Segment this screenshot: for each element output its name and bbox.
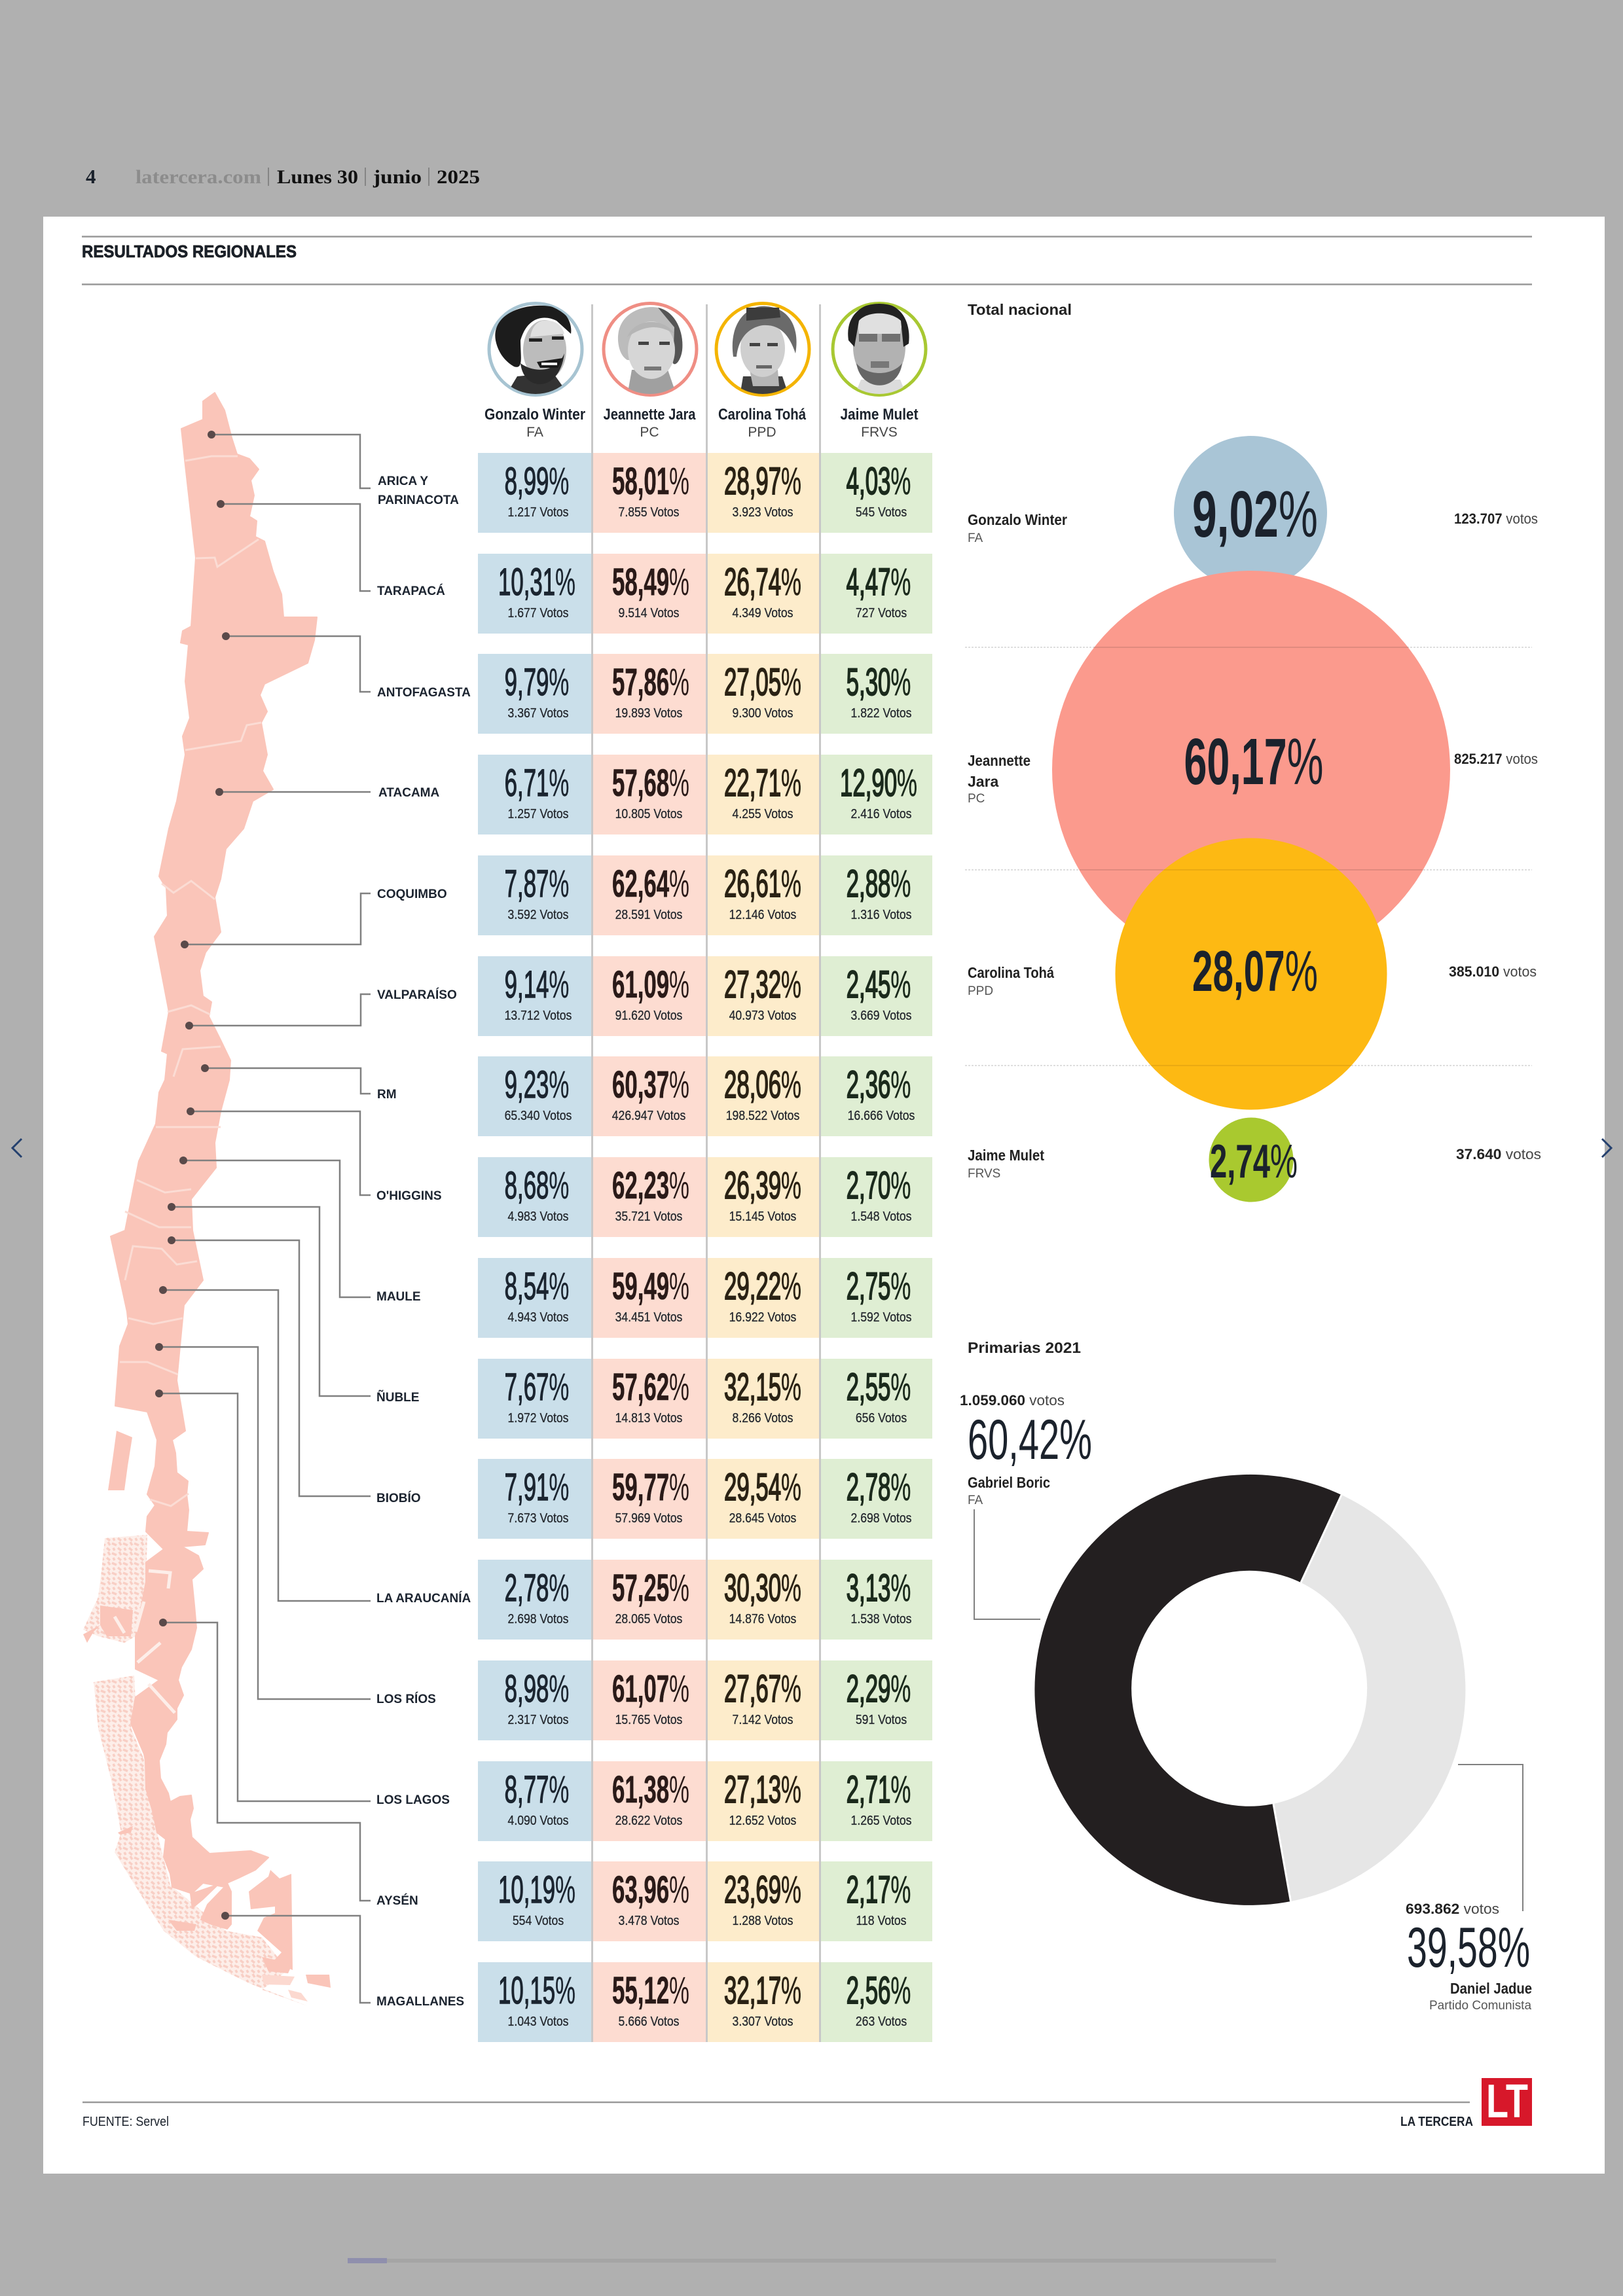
row: La Araucanía: 1.538 Votos: [851, 1611, 911, 1626]
candidate name: Tohá: Carolina Tohá: [718, 406, 807, 423]
row: Tarapacá: 4.349 Votos: [733, 605, 793, 620]
row: Antofagasta: [478, 654, 932, 734]
row: Biobío: [478, 1459, 932, 1539]
row: O'Higgins: 62,23%: [612, 1165, 689, 1207]
connector: Aysén: [159, 1619, 371, 1901]
row: Antofagasta: 9,79%: [505, 662, 569, 704]
connector: Los Lagos: [155, 1390, 371, 1801]
row: O'Higgins: 15.145 Votos: [729, 1209, 796, 1223]
row: Magallanes: 55,12%: [612, 1970, 689, 2012]
row: O'Higgins: 1.548 Votos: [851, 1209, 911, 1223]
connector: Tarapacá: [217, 500, 371, 591]
votes: Winter: 123.707 votos: [1454, 511, 1538, 527]
callout: Daniel Jadue: Partido Comunista: [1429, 1999, 1531, 2013]
region labels: ARICA Y: [378, 475, 428, 488]
row: RM: 28,06%: [724, 1064, 801, 1106]
row: Maule: 34.451 Votos: [615, 1310, 682, 1324]
row: Ñuble: [478, 1359, 932, 1439]
row: Coquimbo: 12.146 Votos: [729, 907, 796, 922]
candidate name: Jara: PC: [640, 425, 659, 440]
portrait: Gonzalo Winter: [489, 304, 582, 396]
row: Magallanes: 5.666 Votos: [619, 2014, 679, 2028]
page header: folio and date: junio: [373, 166, 422, 188]
label: Winter: [968, 511, 1067, 545]
row: Ñuble: 7,67%: [505, 1367, 569, 1408]
row: RM: 9,23%: [505, 1064, 569, 1106]
row: Coquimbo: 26,61%: [724, 863, 801, 905]
connector: RM: [201, 1064, 371, 1094]
bubble: Jara: 60,17%: [1184, 725, 1324, 798]
bubble: Winter: [1174, 436, 1327, 589]
footer: [82, 2075, 1532, 2129]
row: Los Ríos: 61,07%: [612, 1668, 689, 1710]
row: La Araucanía: 2.698 Votos: [508, 1611, 568, 1626]
panel: total nacional: [965, 301, 1541, 1202]
region labels: COQUIMBO: [377, 888, 447, 901]
row: Arica y Parinacota: 1.217 Votos: [508, 505, 568, 519]
row: Maule: 4.943 Votos: [508, 1310, 568, 1324]
row: Coquimbo: 28.591 Votos: [615, 907, 682, 922]
row: Los Ríos: 2,29%: [847, 1668, 911, 1710]
row: RM: 426.947 Votos: [612, 1108, 685, 1122]
connector: Arica y Parinacota: [208, 431, 371, 488]
label: Jara: Jeannette: [968, 752, 1030, 769]
callout: Gabriel Boric: FA: [968, 1494, 983, 1507]
row: Antofagasta: 5,30%: [847, 662, 911, 704]
candidate name: Mulet: Jaime Mulet: [841, 406, 918, 423]
row: Coquimbo: 62,64%: [612, 863, 689, 905]
page header: folio and date: latercera.com: [136, 166, 261, 188]
row: Atacama: 12,90%: [840, 762, 917, 804]
region labels: AYSÉN: [376, 1893, 418, 1908]
connector: O'Higgins: [187, 1107, 371, 1195]
row: Aysén: 2,17%: [847, 1869, 911, 1911]
region labels: MAGALLANES: [376, 1995, 464, 2009]
row: Biobío: 57.969 Votos: [615, 1511, 682, 1525]
votes: Mulet: 37.640 votos: [1456, 1146, 1541, 1162]
page header: folio and date: 2025: [437, 166, 480, 188]
connector: Coquimbo: [181, 893, 371, 948]
row: Coquimbo: 1.316 Votos: [851, 907, 911, 922]
brand name: LA TERCERA: [1400, 2115, 1473, 2129]
row: O'Higgins: 35.721 Votos: [615, 1209, 682, 1223]
row: Biobío: 29,54%: [724, 1467, 801, 1509]
row: Los Lagos: 61,38%: [612, 1769, 689, 1811]
source note: FUENTE: Servel: [82, 2115, 169, 2129]
row: Antofagasta: 57,86%: [612, 662, 689, 704]
candidate name: Jara: [604, 406, 696, 440]
region labels: PARINACOTA: [378, 493, 459, 507]
row: Arica y Parinacota: 58,01%: [612, 461, 689, 503]
region labels: TARAPACÁ: [377, 584, 445, 598]
row: Los Ríos: [478, 1660, 932, 1740]
candidate name: Mulet: [841, 406, 918, 440]
votes: Jara: 825.217 votos: [1454, 751, 1538, 767]
callout: Gabriel Boric: Gabriel Boric: [968, 1474, 1050, 1491]
callout: Daniel Jadue: 693.862 votos: [1406, 1901, 1499, 1917]
bubble: Mulet: [1209, 1118, 1298, 1202]
label: Mulet: FRVS: [968, 1167, 1000, 1181]
bubble: Jara: [1052, 571, 1450, 969]
row: Biobío: 7,91%: [505, 1467, 569, 1509]
row: Coquimbo: 2,88%: [847, 863, 911, 905]
row: Biobío: 2.698 Votos: [851, 1511, 911, 1525]
row: Maule: [478, 1258, 932, 1338]
candidate name: Tohá: PPD: [748, 425, 776, 440]
arrow: previous page: [12, 1139, 22, 1157]
row: Atacama: 1.257 Votos: [508, 806, 568, 821]
region labels: RM: [377, 1088, 397, 1102]
row: Los Ríos: 27,67%: [724, 1668, 801, 1710]
row: O'Higgins: 2,70%: [847, 1165, 911, 1207]
callout: Gabriel Boric: [960, 1392, 1092, 1619]
row: Magallanes: 3.307 Votos: [733, 2014, 793, 2028]
portrait: Jaime Mulet: [833, 303, 926, 396]
island: Chiloé: [108, 1431, 132, 1490]
heading: Total nacional: Total nacional: [968, 301, 1072, 318]
row: Tarapacá: 26,74%: [724, 562, 801, 603]
row: Valparaíso: 27,32%: [724, 964, 801, 1006]
bubble: Tohá: [1116, 838, 1387, 1110]
row: Valparaíso: 91.620 Votos: [615, 1008, 682, 1022]
row: O'Higgins: [478, 1157, 932, 1237]
row: Magallanes: [478, 1962, 932, 2042]
row: Los Lagos: 1.265 Votos: [851, 1813, 911, 1827]
row: Atacama: 57,68%: [612, 762, 689, 804]
row: Ñuble: 57,62%: [612, 1367, 689, 1408]
row: Los Lagos: 27,13%: [724, 1769, 801, 1811]
row: Ñuble: 8.266 Votos: [733, 1410, 793, 1425]
candidate headers: [484, 303, 926, 440]
candidate name: Winter: Gonzalo Winter: [484, 406, 585, 423]
callout: Daniel Jadue: [1406, 1765, 1532, 2013]
connector: Los Ríos: [155, 1343, 371, 1699]
label: Winter: FA: [968, 531, 983, 545]
viewer scrollbar: [348, 2258, 1276, 2263]
row: Maule: 29,22%: [724, 1266, 801, 1308]
Tierra del Fuego and southern islands: [83, 1605, 331, 1988]
row: Aysén: 10,19%: [498, 1869, 575, 1911]
row: Tarapacá: 1.677 Votos: [508, 605, 568, 620]
row: La Araucanía: 2,78%: [505, 1568, 569, 1609]
row: O'Higgins: 4.983 Votos: [508, 1209, 568, 1223]
row: Ñuble: 656 Votos: [856, 1410, 907, 1425]
callout: Gabriel Boric: 60,42%: [968, 1408, 1092, 1471]
row: La Araucanía: 57,25%: [612, 1568, 689, 1609]
row: Atacama: 6,71%: [505, 762, 569, 804]
row: La Araucanía: 14.876 Votos: [729, 1611, 796, 1626]
label: Mulet: [968, 1147, 1044, 1181]
row: Aysén: 1.288 Votos: [733, 1913, 793, 1928]
region labels: ATACAMA: [378, 786, 439, 800]
row: Aysén: [478, 1861, 932, 1941]
row: RM: 16.666 Votos: [848, 1108, 915, 1122]
row: Los Lagos: 2,71%: [847, 1769, 911, 1811]
row: Maule: 59,49%: [612, 1266, 689, 1308]
row: Atacama: 2.416 Votos: [851, 806, 911, 821]
row: Tarapacá: 10,31%: [498, 562, 575, 603]
bubble: Mulet: 2,74%: [1210, 1136, 1298, 1188]
donut chart: [1034, 1475, 1465, 1905]
row: Los Ríos: 7.142 Votos: [733, 1712, 793, 1727]
row: Antofagasta: 9.300 Votos: [733, 706, 793, 720]
label: Tohá: Carolina Tohá: [968, 964, 1054, 981]
candidate name: Tohá: [718, 406, 807, 440]
row: Arica y Parinacota: 4,03%: [847, 461, 911, 503]
label: Jara: Jara: [968, 773, 999, 790]
row: Maule: 16.922 Votos: [729, 1310, 796, 1324]
row: Arica y Parinacota: 28,97%: [724, 461, 801, 503]
region labels: ANTOFAGASTA: [377, 686, 471, 700]
row: Coquimbo: [478, 855, 932, 935]
row: Ñuble: 1.972 Votos: [508, 1410, 568, 1425]
row: Magallanes: 32,17%: [724, 1970, 801, 2012]
row: Tarapacá: 9.514 Votos: [619, 605, 679, 620]
row: Antofagasta: 3.367 Votos: [508, 706, 568, 720]
label: Jara: [968, 752, 1030, 806]
candidate name: Winter: FA: [526, 425, 543, 440]
row: Arica y Parinacota: 7.855 Votos: [619, 505, 679, 519]
candidate name: Mulet: FRVS: [861, 425, 898, 440]
row: Tarapacá: 4,47%: [847, 562, 911, 603]
row: Ñuble: 2,55%: [847, 1367, 911, 1408]
row: Los Ríos: 8,98%: [505, 1668, 569, 1710]
heading: Primarias 2021: Primarias 2021: [968, 1339, 1081, 1356]
row: Valparaíso: [478, 956, 932, 1036]
row: Atacama: 22,71%: [724, 762, 801, 804]
results table: [478, 453, 932, 2042]
candidate name: Jara: Jeannette Jara: [604, 406, 696, 423]
row: Magallanes: 2,56%: [847, 1970, 911, 2012]
callout: Daniel Jadue: Daniel Jadue: [1450, 1980, 1532, 1997]
row: RM: 198.522 Votos: [726, 1108, 799, 1122]
row: Maule: 1.592 Votos: [851, 1310, 911, 1324]
panel: primarias 2021: [960, 1339, 1532, 2013]
connector: Biobío: [168, 1236, 371, 1496]
connector: Valparaíso: [185, 994, 371, 1030]
row: Atacama: 4.255 Votos: [733, 806, 793, 821]
region labels: MAULE: [376, 1290, 421, 1304]
connector: Magallanes: [221, 1912, 371, 2003]
row: Aysén: 23,69%: [724, 1869, 801, 1911]
row: Los Lagos: 28.622 Votos: [615, 1813, 682, 1827]
row: Aysén: 118 Votos: [856, 1913, 906, 1928]
callout: Gabriel Boric: 1.059.060 votos: [960, 1392, 1065, 1408]
region labels: LA ARAUCANÍA: [376, 1591, 471, 1605]
row: RM: [478, 1056, 932, 1136]
row: Arica y Parinacota: 8,99%: [505, 461, 569, 503]
callout: Daniel Jadue: 39,58%: [1407, 1916, 1530, 1979]
row: Valparaíso: 3.669 Votos: [851, 1008, 911, 1022]
page header: folio and date: 4: [86, 165, 96, 188]
row: Los Lagos: 12.652 Votos: [729, 1813, 796, 1827]
row: O'Higgins: 26,39%: [724, 1165, 801, 1207]
row: Los Lagos: [478, 1761, 932, 1841]
row: Los Lagos: 4.090 Votos: [508, 1813, 568, 1827]
label: Tohá: [968, 964, 1054, 998]
row: Arica y Parinacota: [478, 453, 932, 533]
connector: Atacama: [215, 788, 371, 796]
connector: Antofagasta: [222, 632, 371, 692]
region labels: O'HIGGINS: [376, 1189, 442, 1203]
row: Los Lagos: 8,77%: [505, 1769, 569, 1811]
row: Ñuble: 14.813 Votos: [615, 1410, 682, 1425]
row: Los Ríos: 15.765 Votos: [615, 1712, 682, 1727]
portrait: Carolina Tohá: [716, 304, 809, 396]
region labels: BIOBÍO: [376, 1491, 421, 1505]
connector: Maule: [179, 1157, 371, 1297]
row: Antofagasta: 27,05%: [724, 662, 801, 704]
row: Tarapacá: 58,49%: [612, 562, 689, 603]
row: Biobío: 28.645 Votos: [729, 1511, 796, 1525]
row: Tarapacá: [478, 554, 932, 634]
section title: RESULTADOS REGIONALES: [82, 242, 297, 261]
row: Aysén: 554 Votos: [513, 1913, 564, 1928]
row: Aysén: 63,96%: [612, 1869, 689, 1911]
bubble: Tohá: 28,07%: [1192, 939, 1318, 1003]
arrow: next page: [1602, 1139, 1611, 1157]
row: Maule: 8,54%: [505, 1266, 569, 1308]
row: Maule: 2,75%: [847, 1266, 911, 1308]
label: Mulet: Jaime Mulet: [968, 1147, 1044, 1164]
row: Arica y Parinacota: 545 Votos: [856, 505, 907, 519]
logo: LT: LT: [1486, 2075, 1528, 2128]
region labels: VALPARAÍSO: [377, 988, 457, 1002]
row: Ñuble: 32,15%: [724, 1367, 801, 1408]
connector: La Araucanía: [159, 1286, 371, 1601]
connector lines from regions to labels: [155, 431, 371, 2003]
row: RM: 65.340 Votos: [505, 1108, 572, 1122]
connector: Ñuble: [168, 1203, 371, 1396]
label: Winter: Gonzalo Winter: [968, 511, 1067, 528]
row: Valparaíso: 61,09%: [612, 964, 689, 1006]
row: Los Ríos: 591 Votos: [856, 1712, 907, 1727]
row: Tarapacá: 727 Votos: [856, 605, 907, 620]
row: Atacama: [478, 755, 932, 834]
portrait: Jeannette Jara: [604, 304, 697, 396]
row: Coquimbo: 7,87%: [505, 863, 569, 905]
row: Biobío: 59,77%: [612, 1467, 689, 1509]
candidate name: Winter: [484, 406, 585, 440]
row: Valparaíso: 9,14%: [505, 964, 569, 1006]
label: Jara: PC: [968, 792, 985, 806]
row: RM: 60,37%: [612, 1064, 689, 1106]
row: Arica y Parinacota: 3.923 Votos: [733, 505, 793, 519]
page header: folio and date: [86, 165, 480, 188]
row: Coquimbo: 3.592 Votos: [508, 907, 568, 922]
row: O'Higgins: 8,68%: [505, 1165, 569, 1207]
votes: Tohá: 385.010 votos: [1449, 963, 1537, 980]
row: Biobío: 7.673 Votos: [508, 1511, 568, 1525]
row: La Araucanía: 30,30%: [724, 1568, 801, 1609]
row: Atacama: 10.805 Votos: [615, 806, 682, 821]
row: Los Ríos: 2.317 Votos: [508, 1712, 568, 1727]
row: Valparaíso: 2,45%: [847, 964, 911, 1006]
map of Chile: [83, 393, 331, 2006]
row: Valparaíso: 13.712 Votos: [505, 1008, 572, 1022]
row: La Araucanía: [478, 1560, 932, 1640]
row: La Araucanía: 3,13%: [847, 1568, 911, 1609]
row: Biobío: 2,78%: [847, 1467, 911, 1509]
bubble: Winter: 9,02%: [1192, 478, 1318, 551]
row: La Araucanía: 28.065 Votos: [615, 1611, 682, 1626]
row: Magallanes: 10,15%: [498, 1970, 575, 2012]
region labels: ÑUBLE: [376, 1390, 419, 1405]
row: Antofagasta: 19.893 Votos: [615, 706, 682, 720]
row: Valparaíso: 40.973 Votos: [729, 1008, 796, 1022]
page header: folio and date: Lunes 30: [277, 166, 358, 188]
row: Aysén: 3.478 Votos: [619, 1913, 679, 1928]
row: RM: 2,36%: [847, 1064, 911, 1106]
row: Antofagasta: 1.822 Votos: [851, 706, 911, 720]
row: Magallanes: 263 Votos: [856, 2014, 907, 2028]
row: Magallanes: 1.043 Votos: [508, 2014, 568, 2028]
region labels: LOS RÍOS: [376, 1692, 436, 1706]
region labels: [376, 475, 471, 2009]
region labels: LOS LAGOS: [376, 1793, 450, 1807]
label: Tohá: PPD: [968, 984, 993, 998]
